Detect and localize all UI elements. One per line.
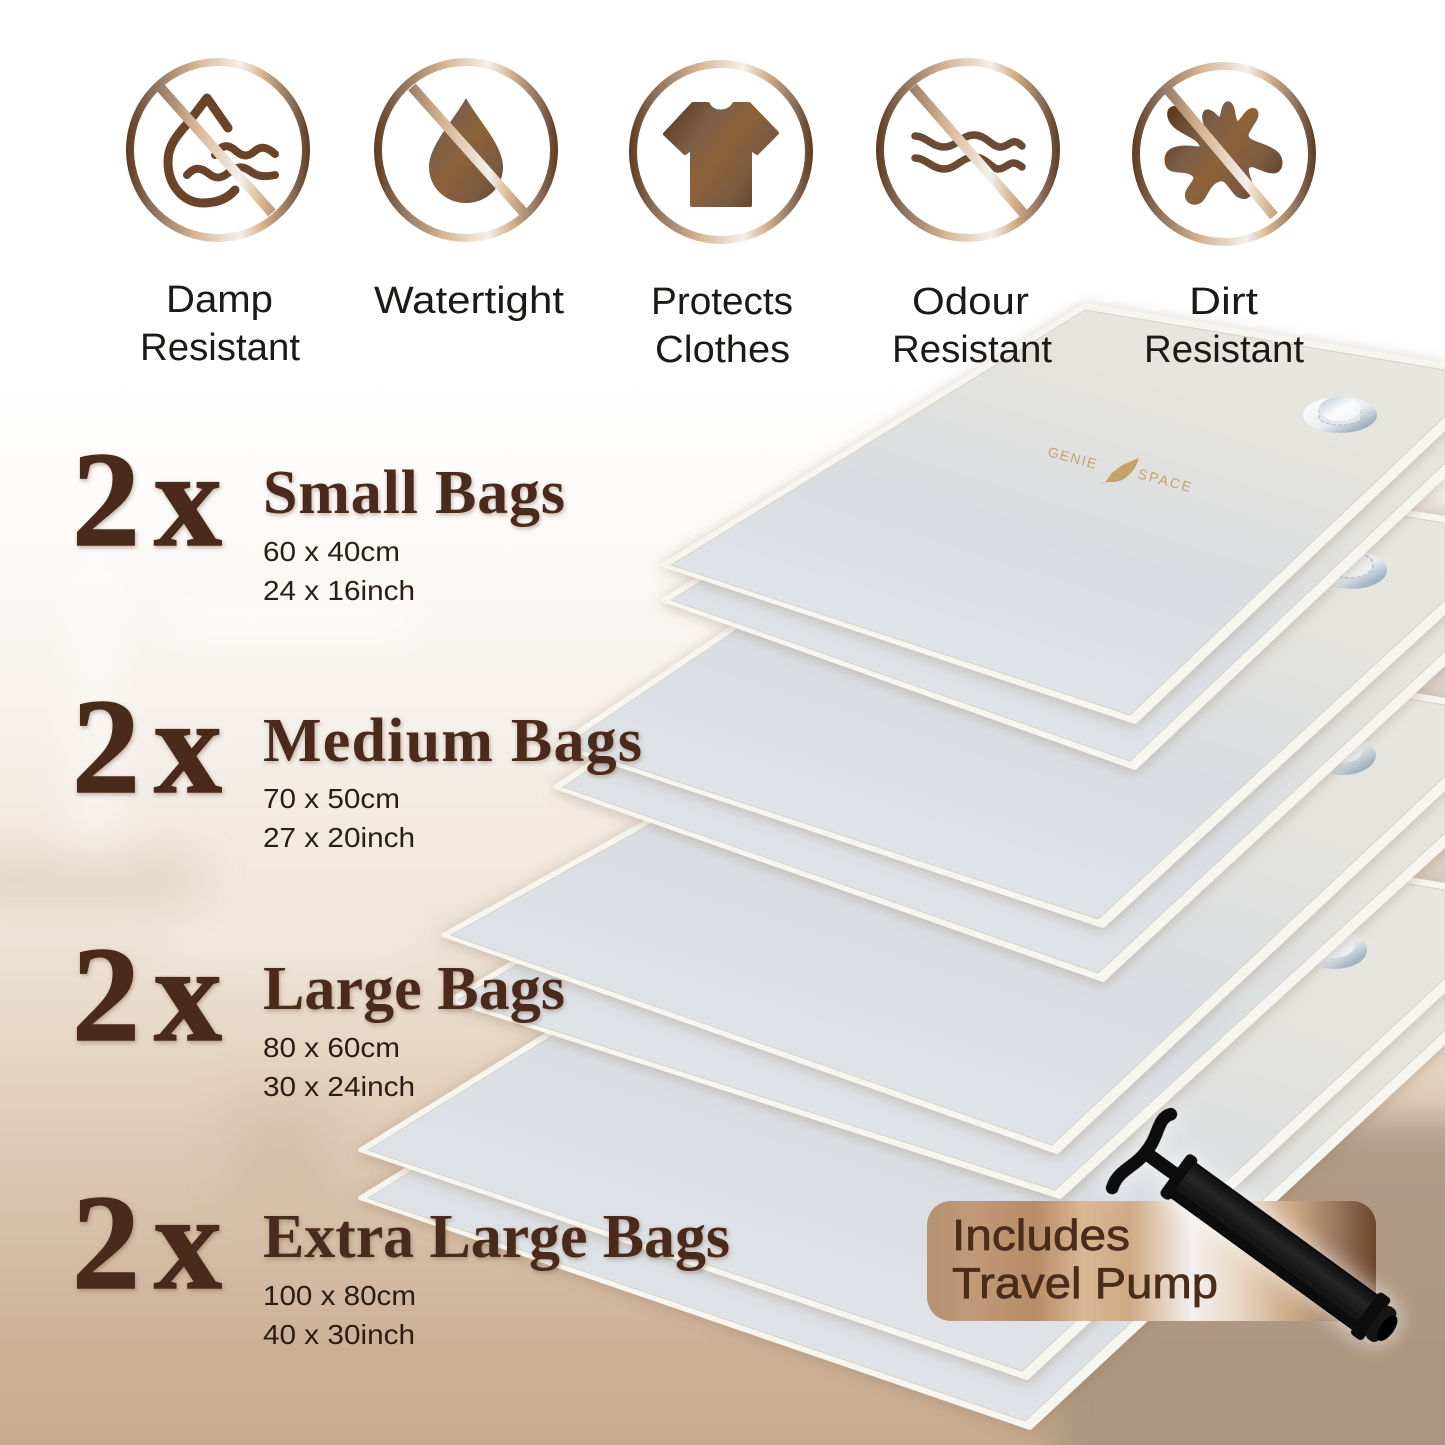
brand logo on bag: SPACE [1136, 465, 1195, 496]
icon: no damp [130, 62, 306, 238]
label: Odour Resistant: Resistant [892, 329, 1052, 371]
small bag, upper [663, 305, 1445, 722]
large bag, lower [450, 670, 1445, 1197]
label: Dirt Resistant: Dirt [1189, 281, 1259, 323]
size row: medium bags: 70 x 50cm [263, 783, 400, 814]
bag stack [360, 305, 1445, 1428]
large bag, upper [443, 625, 1445, 1152]
callout: includes travel pump [927, 1201, 1376, 1321]
icon: travel pump [1111, 1111, 1420, 1371]
size row: small bags: 2x [72, 425, 236, 575]
size row: medium bags: 2x [72, 672, 236, 822]
size row: large bags [72, 920, 565, 1102]
size row: large bags: 30 x 24inch [263, 1071, 415, 1102]
size row: small bags [72, 425, 565, 606]
extra large bag, upper [360, 798, 1445, 1378]
label: Dirt Resistant: Resistant [1144, 329, 1304, 371]
size row: medium bags: 27 x 20inch [263, 822, 415, 853]
size row: extra large bags: Extra Large Bags [263, 1203, 730, 1271]
small bag, lower [663, 340, 1445, 768]
brand logo on bag [1046, 443, 1195, 496]
size row: medium bags [72, 672, 642, 853]
label: Damp Resistant [140, 279, 300, 369]
size row: extra large bags: 40 x 30inch [263, 1319, 415, 1350]
icon: valve, large bag [1310, 735, 1376, 775]
size row: extra large bags: 2x [72, 1168, 236, 1318]
size row: large bags: 80 x 60cm [263, 1032, 400, 1063]
size row: large bags: 2x [72, 920, 236, 1070]
size row: large bags: Large Bags [263, 955, 565, 1023]
icon: t-shirt [633, 64, 809, 240]
callout: includes travel pump: Includes [952, 1211, 1130, 1260]
size row: medium bags: Medium Bags [263, 707, 642, 775]
label: Protects Clothes [651, 281, 793, 371]
extra large bag, lower [360, 863, 1445, 1428]
size row: small bags: 60 x 40cm [263, 536, 400, 567]
size row: small bags: Small Bags [263, 459, 565, 527]
size row: extra large bags [72, 1168, 730, 1350]
label: Protects Clothes: Clothes [655, 329, 790, 371]
label: Damp Resistant: Resistant [140, 327, 300, 369]
brand logo on bag: GENIE [1046, 443, 1100, 472]
icon: watertight [378, 62, 554, 238]
label: Odour Resistant: Odour [912, 281, 1029, 323]
callout: includes travel pump: Travel Pump [952, 1259, 1218, 1308]
label: Dirt Resistant [1144, 281, 1304, 371]
icon: no odour [880, 62, 1056, 238]
medium bag, upper [558, 447, 1445, 926]
label: Watertight: Watertight [374, 280, 564, 322]
medium bag, lower [555, 490, 1445, 980]
size row: small bags: 24 x 16inch [263, 575, 415, 606]
icon: valve, medium bag [1317, 551, 1387, 589]
icon: valve, extra large bag [1303, 931, 1367, 969]
icon: valve, small bag [1303, 397, 1377, 433]
icon: no dirt splat [1136, 66, 1312, 242]
label: Damp Resistant: Damp [166, 279, 273, 321]
label: Odour Resistant [892, 281, 1052, 371]
label: Protects Clothes: Protects [651, 281, 793, 323]
size row: extra large bags: 100 x 80cm [263, 1280, 416, 1311]
